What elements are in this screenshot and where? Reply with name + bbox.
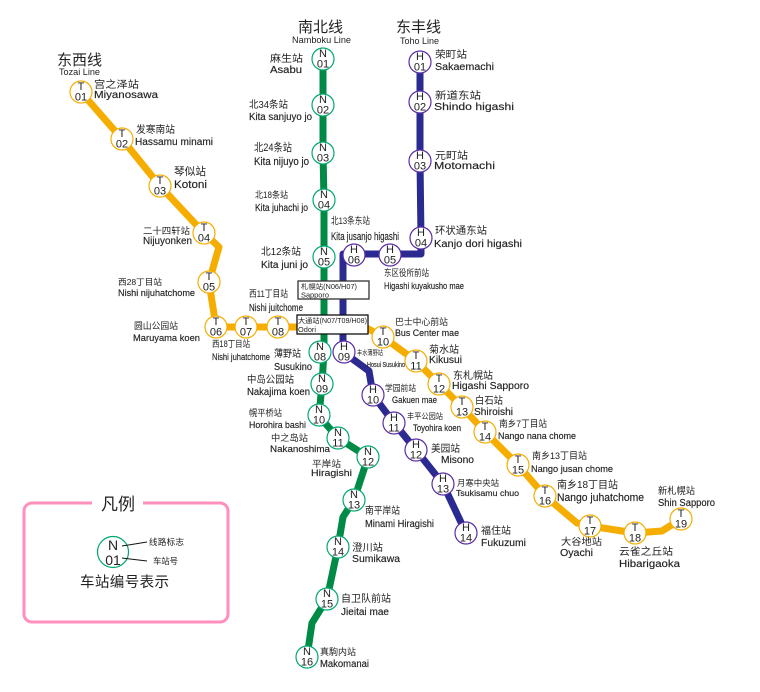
station N05: N	[320, 246, 328, 258]
station H04	[410, 227, 432, 250]
station H09	[333, 341, 355, 364]
station T07: T	[243, 316, 250, 328]
station T07: 07	[240, 326, 252, 338]
label T10: 巴士中心前站	[395, 316, 448, 327]
label T16: 南乡18丁目站	[557, 478, 618, 491]
label N05: Kita juni jo	[261, 260, 308, 271]
label T17	[560, 536, 603, 559]
heading: Toho Line	[396, 19, 441, 47]
label T03	[174, 164, 207, 191]
label H06	[331, 215, 399, 243]
station T11: 11	[410, 360, 422, 372]
station T08: T	[275, 316, 282, 328]
callout: Sapporo station box: 札幌站(N06/H07)	[301, 282, 357, 291]
station N09: N	[318, 373, 326, 385]
label T17: Oyachi	[560, 548, 593, 559]
station H01: H	[416, 51, 424, 63]
label N04: 北18条站	[255, 189, 288, 200]
label T03: Kotoni	[174, 179, 207, 191]
label T18	[619, 545, 680, 570]
label H01	[435, 48, 494, 73]
label N13: Minami Hiragishi	[365, 519, 434, 530]
station T05: T	[206, 271, 213, 283]
label T07	[212, 338, 270, 363]
label T06	[133, 320, 200, 344]
station N15: N	[323, 588, 331, 600]
station N12: 12	[362, 456, 374, 468]
station T01: 01	[75, 92, 87, 104]
label T15: 南乡13丁目站	[532, 450, 587, 462]
label N16	[320, 646, 369, 670]
station N10: 10	[313, 414, 325, 426]
label N02: Kita sanjuyo jo	[249, 112, 312, 123]
callout: Sapporo station box	[298, 281, 369, 300]
label H05	[384, 267, 464, 292]
station T05: 05	[203, 282, 215, 294]
label T10	[395, 316, 459, 339]
station T02: 02	[116, 138, 128, 150]
station H02: 02	[414, 102, 426, 114]
station N14: N	[334, 536, 342, 548]
Namboku line	[247, 19, 434, 670]
label N15: Jieitai mae	[341, 607, 389, 618]
label H06: 北13条东站	[331, 215, 370, 227]
label T01	[94, 78, 158, 101]
label T05: 西28丁目站	[118, 277, 162, 287]
station T12	[428, 373, 450, 396]
label T01: 宫之泽站	[94, 78, 139, 91]
station N09	[311, 373, 333, 396]
station N04: N	[320, 189, 328, 201]
station T19	[670, 508, 692, 530]
label H06: Kita jusanjo higashi	[331, 231, 399, 243]
station T03: T	[157, 175, 164, 187]
legend heading: 凡例	[101, 495, 135, 514]
label N03: 北24条站	[254, 140, 292, 154]
station T16	[534, 485, 556, 508]
station T07	[235, 316, 257, 338]
station T06: T	[213, 316, 220, 328]
label T05	[118, 277, 195, 299]
label N14	[352, 541, 400, 565]
station N13: 13	[348, 500, 360, 512]
station H09: 09	[338, 352, 350, 364]
station N13	[343, 489, 365, 512]
station H14: 14	[460, 532, 472, 544]
label H12	[431, 442, 474, 466]
station T03: 03	[154, 186, 166, 198]
station N01	[312, 48, 334, 70]
label H03: Motomachi	[434, 161, 495, 172]
station H10: H	[369, 384, 377, 396]
label T02: Hassamu minami	[135, 137, 213, 148]
label N08: Susukino	[274, 362, 312, 373]
label N11	[270, 432, 331, 455]
station T10: 10	[377, 336, 389, 348]
station T10: T	[380, 326, 387, 338]
panel: legend	[24, 495, 228, 622]
label T08	[249, 288, 303, 314]
label N13: 南平岸站	[365, 504, 400, 517]
station H12	[405, 439, 427, 462]
label H12: Misono	[441, 455, 474, 466]
station N13: N	[350, 489, 358, 501]
station N08	[309, 341, 331, 364]
station H12: 12	[410, 450, 422, 462]
label T07: Nishi juhatchome	[212, 352, 270, 363]
station H02: H	[416, 91, 424, 103]
station T17: T	[587, 515, 594, 527]
station H04: H	[417, 227, 425, 239]
station N03: 03	[317, 152, 329, 164]
label T06: Maruyama koen	[133, 333, 200, 344]
station H05	[379, 244, 401, 266]
label N10: 幌平桥站	[249, 407, 282, 418]
heading: Toho Line: Toho Line	[400, 36, 439, 47]
label H01: Sakaemachi	[435, 62, 494, 73]
heading: Namboku Line: Namboku Line	[292, 35, 351, 46]
station T17	[579, 515, 601, 538]
label T14: 南乡7丁目站	[499, 418, 547, 430]
label N02	[249, 98, 312, 123]
station T08: 08	[272, 326, 284, 338]
station N14: 14	[332, 546, 344, 558]
label T13: Shiroishi	[474, 407, 513, 418]
label H09: Hosui Susukino	[367, 360, 405, 369]
legend pointer: line symbol: 线路标志	[149, 537, 184, 547]
label T05: Nishi nijuhatchome	[118, 288, 195, 299]
label T01: Miyanosawa	[94, 90, 158, 101]
label N09: 中岛公园站	[247, 373, 294, 386]
label N12	[311, 458, 352, 478]
station H06: 06	[348, 254, 360, 266]
station T10	[372, 326, 394, 348]
label H11: 丰平公园站	[407, 411, 443, 421]
label N11: 中之岛站	[271, 432, 308, 443]
station N02	[312, 94, 334, 116]
heading: Tozai Line	[57, 52, 102, 78]
label N12: Hiragishi	[311, 468, 352, 478]
label H05: Higashi kuyakusho mae	[384, 281, 464, 292]
label T12: Higashi Sapporo	[452, 381, 529, 392]
label H11: Toyohira koen	[413, 423, 461, 433]
label T06: 圆山公园站	[134, 320, 178, 331]
station H06: H	[350, 244, 358, 256]
station H14: H	[462, 522, 470, 534]
station T13	[451, 396, 473, 418]
label H11	[407, 411, 461, 433]
label N09: Nakajima koen	[247, 387, 310, 398]
label T08: Nishi juitchome	[249, 302, 303, 314]
station N14	[327, 536, 349, 558]
label H04: Kanjo dori higashi	[434, 239, 522, 250]
Tozai line	[57, 52, 715, 570]
station N11: N	[334, 427, 342, 439]
station N09: 09	[316, 384, 328, 396]
label T12	[452, 369, 529, 392]
label H13: 月寒中央站	[457, 478, 499, 488]
label N16: 真駒内站	[320, 646, 356, 657]
heading: Toho Line: 东丰线	[396, 19, 441, 36]
heading: Tozai Line: Tozai Line	[59, 67, 100, 78]
station T19: 19	[675, 518, 687, 530]
station N16: N	[303, 646, 311, 658]
label N04: Kita juhachi jo	[255, 203, 308, 214]
station T14	[474, 421, 496, 444]
label T18: Hibarigaoka	[619, 559, 680, 570]
label T19: 新札幌站	[658, 485, 695, 497]
legend sample station icon	[98, 536, 128, 568]
station T11: T	[413, 350, 420, 362]
label T15: Nango jusan chome	[531, 464, 613, 475]
station H09: H	[340, 341, 348, 353]
legend pointer: station number: 车站号	[153, 556, 178, 566]
station T12: 12	[433, 384, 445, 396]
label T03: 琴似站	[174, 164, 206, 178]
callout: Odori station box: 大通站(N07/T09/H08)	[298, 316, 367, 325]
station H05: 05	[384, 254, 396, 266]
station T06	[205, 316, 227, 338]
callout: Odori station box	[297, 315, 368, 334]
label H05: 东区役所前站	[384, 267, 429, 278]
heading: Namboku Line: 南北线	[298, 19, 343, 36]
label T02	[135, 123, 213, 148]
label H09: 丰水薄野站	[357, 348, 383, 357]
legend caption: 车站编号表示	[80, 574, 169, 591]
station N16: 16	[301, 656, 313, 668]
label T15	[531, 450, 613, 475]
label N13	[365, 504, 434, 530]
station H13	[432, 473, 454, 496]
label H01: 荣町站	[435, 48, 467, 61]
station T13: 13	[456, 406, 468, 418]
station N08: N	[316, 341, 324, 353]
station T04: 04	[198, 232, 210, 244]
label T11: Kikusui	[429, 355, 462, 366]
label N12: 平岸站	[312, 458, 341, 469]
station N01: N	[319, 48, 327, 60]
station T15	[507, 454, 529, 476]
station T17: 17	[584, 526, 596, 538]
station T01	[70, 81, 92, 104]
station N08: 08	[314, 352, 326, 364]
station N11	[327, 427, 349, 450]
label N03	[254, 140, 309, 168]
station N03: N	[319, 142, 327, 154]
station H03: H	[416, 150, 424, 162]
station H12: H	[412, 439, 420, 451]
label T10: Bus Center mae	[395, 328, 459, 339]
station T04: T	[201, 222, 208, 234]
station H03	[409, 150, 431, 172]
station T02	[111, 128, 133, 150]
label H02: 新道东站	[435, 89, 481, 102]
station H06	[343, 244, 365, 266]
label T11: 菊水站	[429, 343, 459, 356]
label N05	[261, 245, 308, 271]
station H03: 03	[414, 160, 426, 172]
station T03	[149, 175, 171, 198]
label T11	[429, 343, 462, 366]
station N05	[313, 246, 335, 268]
label T17: 大谷地站	[561, 536, 603, 548]
station N02: N	[319, 94, 327, 106]
station N02: 02	[317, 104, 329, 116]
label H10: 学园前站	[385, 383, 416, 393]
station N01: 01	[317, 58, 329, 70]
station H04: 04	[415, 238, 427, 250]
label H14: Fukuzumi	[481, 538, 526, 549]
station H05: H	[386, 244, 394, 256]
label N15: 自卫队前站	[341, 592, 391, 605]
station N16	[296, 646, 318, 668]
label T18: 云雀之丘站	[619, 545, 673, 558]
label T19: Shin Sapporo	[658, 498, 715, 509]
label H12: 美园站	[431, 442, 460, 455]
callout: Sapporo station box: Sapporo	[301, 292, 329, 300]
label H03: 元町站	[435, 149, 468, 162]
station N11: 11	[332, 438, 344, 450]
label N15	[341, 592, 391, 618]
label N14: Sumikawa	[352, 554, 400, 565]
station H02	[409, 91, 431, 114]
station H01: 01	[414, 62, 426, 74]
label N05: 北12条站	[261, 245, 301, 258]
station N12: N	[364, 446, 372, 458]
station T15: 15	[512, 464, 524, 476]
station N04: 04	[318, 200, 330, 212]
station H11	[383, 412, 405, 434]
label N01: Asabu	[270, 65, 302, 76]
label T14: Nango nana chome	[498, 431, 576, 442]
label H10: Gakuen mae	[392, 395, 437, 405]
station T15: T	[515, 454, 522, 466]
label N01: 麻生站	[270, 52, 303, 65]
label H04: 环状通东站	[435, 224, 487, 237]
label N16: Makomanai	[320, 659, 369, 670]
label H14: 福住站	[481, 524, 511, 537]
station T12: T	[436, 373, 443, 385]
label T04	[143, 225, 192, 247]
station N05: 05	[318, 256, 330, 268]
station T14: 14	[479, 432, 491, 444]
station H13: 13	[437, 484, 449, 496]
label N03: Kita nijuyo jo	[254, 156, 309, 168]
label N09	[247, 373, 310, 398]
station T14: T	[482, 421, 489, 433]
label N11: Nakanoshima	[270, 444, 331, 455]
label T14	[498, 418, 576, 442]
heading: Namboku Line	[292, 19, 351, 46]
station T18: T	[632, 522, 639, 534]
station T01: T	[78, 81, 85, 93]
station T16: 16	[539, 496, 551, 508]
station H14	[455, 522, 477, 544]
label T02: 发寒南站	[136, 123, 175, 136]
label T13: 白石站	[475, 394, 503, 407]
label N10: Horohira bashi	[249, 420, 306, 431]
label H10	[385, 383, 437, 405]
station H11: 11	[388, 422, 400, 434]
label N02: 北34条站	[249, 98, 288, 111]
label T16	[557, 478, 644, 504]
legend sample station icon: 01	[105, 552, 121, 568]
label T13	[474, 394, 513, 418]
station H10: 10	[367, 394, 379, 406]
station H11: H	[390, 412, 398, 424]
station N04	[313, 189, 335, 212]
station N10	[308, 404, 330, 426]
station N03	[312, 142, 334, 164]
label T12: 东札幌站	[453, 369, 493, 382]
station N15	[316, 588, 338, 610]
station T13: T	[459, 396, 466, 408]
label H04	[434, 224, 522, 250]
label T19	[658, 485, 715, 509]
label N08	[274, 347, 312, 373]
heading: Tozai Line: 东西线	[57, 52, 102, 69]
callout: Odori station box: Odori	[298, 327, 316, 334]
label H02: Shindo higashi	[434, 102, 514, 113]
station H13: H	[439, 473, 447, 485]
station T18	[624, 522, 646, 544]
station T19: T	[678, 508, 685, 520]
station T16: T	[542, 485, 549, 497]
station H10	[362, 384, 384, 406]
station T04	[193, 222, 215, 244]
station T08	[267, 316, 289, 338]
label N14: 澄川站	[352, 541, 383, 554]
station T18: 18	[629, 532, 641, 544]
station H01	[409, 51, 431, 74]
station N12	[357, 446, 379, 468]
label T08: 西11丁目站	[249, 288, 288, 300]
label H09	[357, 348, 405, 369]
station T02: T	[119, 128, 126, 140]
station T06: 06	[210, 326, 222, 338]
label H14	[481, 524, 526, 549]
legend sample station icon: N	[108, 537, 118, 553]
label N08: 薄野站	[274, 347, 301, 360]
label N04	[255, 189, 308, 214]
label T04: Nijuyonken	[143, 236, 192, 247]
station T11	[405, 350, 427, 372]
label N01	[270, 52, 303, 76]
legend pointer: station number	[122, 556, 178, 566]
label T04: 二十四轩站	[143, 225, 190, 236]
label H13	[456, 478, 519, 498]
station N15: 15	[321, 598, 333, 610]
Toho line	[331, 19, 526, 549]
label H13: Tsukisamu chuo	[456, 488, 519, 498]
label N10	[249, 407, 306, 431]
label T16: Nango juhatchome	[557, 492, 644, 504]
station N10: N	[315, 404, 323, 416]
station T05	[198, 271, 220, 294]
label H03	[434, 149, 495, 172]
label H02	[434, 89, 514, 113]
legend pointer: line symbol	[122, 537, 184, 547]
label T07: 西18丁目站	[212, 338, 250, 349]
